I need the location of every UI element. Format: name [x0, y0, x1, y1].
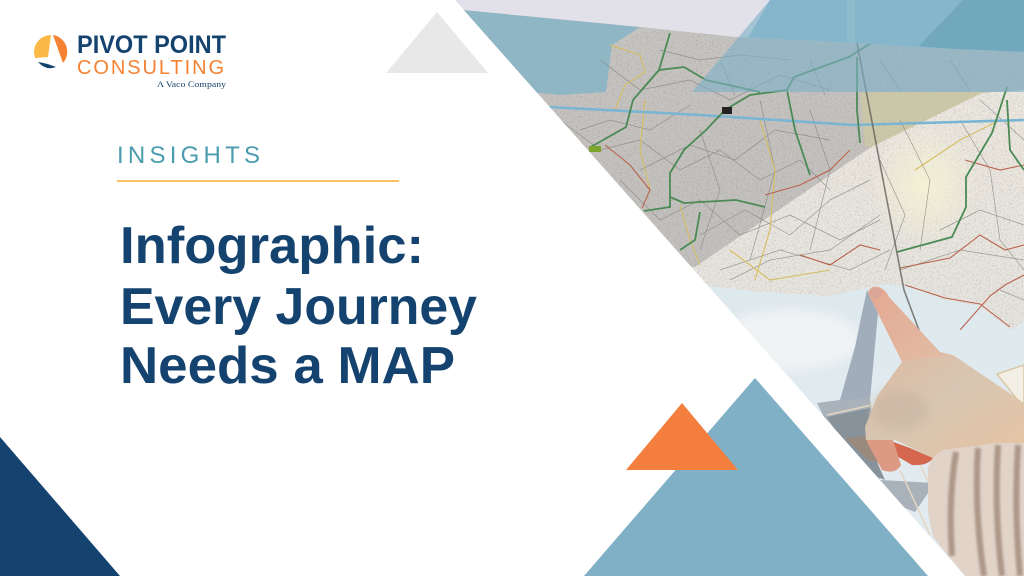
title line two: Every Journey	[120, 278, 477, 336]
green motorways	[589, 33, 1024, 252]
title	[120, 217, 477, 395]
yellow divider	[117, 180, 399, 182]
darker inset under hand	[827, 408, 885, 480]
navy corner triangle	[0, 437, 120, 576]
logo wordmark line one: PIVOT POINT	[77, 31, 226, 59]
logo tagline: A Vaco Company	[157, 79, 227, 89]
sea base layer	[706, 49, 1024, 576]
fingernail	[870, 288, 882, 298]
cloud-like sea lightening	[738, 310, 858, 370]
green map patch	[589, 146, 601, 152]
pointing finger	[868, 287, 953, 362]
logo orange sail	[53, 35, 67, 63]
hand	[865, 287, 1024, 472]
teal background wall	[748, 0, 963, 49]
right coast road	[905, 285, 1010, 327]
blue triangle	[584, 378, 928, 576]
lower shadow block	[817, 398, 935, 512]
logo	[34, 31, 227, 89]
pointing finger shadow	[817, 290, 878, 403]
shadow across map	[455, 0, 1024, 267]
pale teal overlay band	[692, 0, 1024, 92]
logo wordmark line two: CONSULTING	[77, 57, 224, 79]
sun spot	[884, 142, 964, 228]
curled red finger	[894, 442, 933, 466]
back of hand	[865, 355, 1024, 458]
sweater stripes	[951, 445, 1020, 576]
logo yellow sail	[34, 35, 51, 58]
pale inset line	[827, 405, 930, 535]
sky behind map	[455, 0, 770, 38]
section label: INSIGHTS	[117, 142, 260, 169]
map photograph	[455, 0, 1024, 576]
road network	[549, 33, 1024, 330]
centre fold	[856, 43, 920, 330]
land with roads	[455, 0, 1024, 340]
map detail under fingertips	[845, 436, 878, 462]
dark teal window corner	[919, 0, 1024, 55]
orange triangle	[626, 403, 738, 470]
map marker	[722, 107, 732, 114]
logo boat	[38, 62, 56, 68]
title line three: Needs a MAP	[120, 337, 455, 395]
sweater sleeve	[928, 443, 1024, 576]
knuckle shading	[868, 390, 924, 426]
blue river line	[549, 107, 1024, 125]
map texture	[538, 27, 1024, 329]
curled finger	[866, 440, 901, 472]
minor roads	[560, 50, 1024, 300]
sea on upper left	[463, 10, 640, 95]
pole behind map	[847, 0, 855, 44]
title line one: Infographic:	[120, 217, 424, 275]
sunlit land	[538, 27, 1024, 330]
folded road map	[455, 0, 1024, 576]
grey triangle	[386, 12, 488, 73]
warm light beyond the fold	[860, 92, 985, 147]
inset map	[997, 365, 1024, 408]
red roads	[605, 145, 1024, 330]
yellow roads	[610, 45, 1000, 280]
